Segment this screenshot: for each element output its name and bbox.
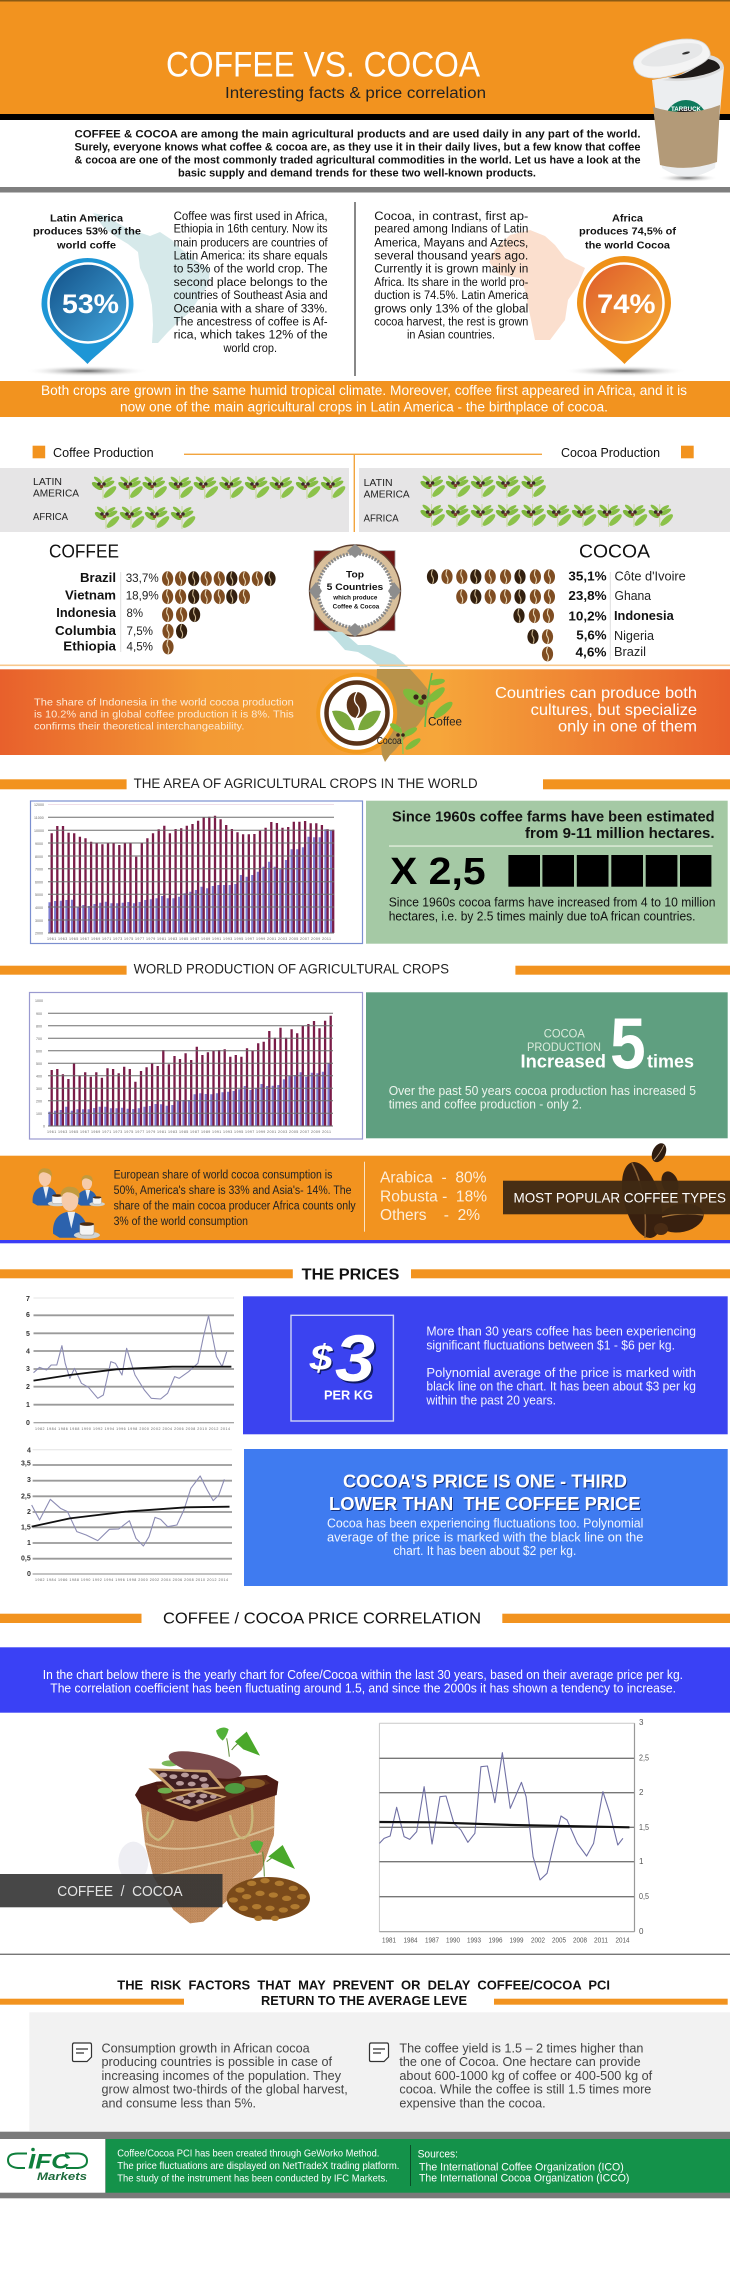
line chart: cocoa price — [21, 1448, 232, 1582]
axis labels: 500 — [36, 1062, 42, 1066]
label: Africa share: the world Cocoa — [585, 239, 670, 251]
icon: bean and leaves logo — [316, 673, 397, 754]
icon: coffee beans — [615, 1141, 706, 1242]
icon: coffee drinkers — [33, 1168, 105, 1239]
text: Indonesia share: confirms their theoretical interchangeability. — [34, 721, 244, 733]
line chart: coffee price: 1982 1984 1986 1988 1990 1992 1994 1996 1998 2000 2002 2004 2006 2008 2010 2012 2014 — [35, 1427, 230, 1431]
text: cocoa origins: Cocoa, in contrast, first ap- — [374, 211, 528, 223]
axis labels: 0 — [43, 1124, 45, 1128]
line chart: coffee price: 4 — [26, 1348, 30, 1356]
axis labels: 11000 — [34, 816, 44, 820]
panel: cocoa price one third lower: LOWER THAN THE COFFEE PRICE — [330, 1495, 642, 1515]
text: sources: The International Coffee Organization (ICO) — [419, 2162, 624, 2174]
intro text: basic supply and demand trends for these two well-known products. — [178, 168, 536, 180]
panel: cocoa production by region: AFRICA — [364, 513, 399, 524]
panel: cocoa production increased 5 times: times and coffee production - only 2. — [389, 1098, 582, 1112]
axis labels: 5000 — [35, 893, 43, 897]
text: coffee price fluctuations: More than 30 years coffee has been experiencing — [426, 1325, 696, 1339]
line chart: coffee price: 5 — [26, 1331, 30, 1338]
text: coffee yield risk: cocoa. While the coffee is still 1.5 times more — [399, 2083, 651, 2097]
panel: cocoa production increased 5 times — [366, 992, 728, 1138]
list: top cocoa producers — [427, 542, 686, 661]
label: Latin America share: produces 53% of the — [33, 226, 141, 238]
list: top coffee producers: 18,9% — [126, 588, 159, 602]
axis labels: 700 — [36, 1037, 42, 1041]
list: top coffee producers: 4,5% — [126, 640, 153, 654]
subtitle: Interesting facts & price correlation — [225, 85, 486, 102]
list: top coffee producers: 8% — [126, 606, 143, 620]
panel: cocoa production by region — [359, 468, 730, 532]
red bars — [52, 816, 333, 933]
banner: humid tropical climate: Both crops are grown in the same humid tropical climate. Moreover, coffee first appeared in Africa, and it is — [41, 383, 687, 398]
panel: cocoa production increased 5 times: 5 — [610, 1004, 646, 1084]
logo: IFC Markets: Markets — [37, 2171, 87, 2183]
blue bars — [50, 829, 331, 933]
panel: cocoa price one third lower: COCOA'S PRICE IS ONE - THIRD — [343, 1472, 627, 1492]
label: Coffee: Coffee — [428, 717, 462, 729]
axis labels: 10000 — [34, 829, 44, 833]
panel: cocoa production increased 5 times: Increased — [520, 1051, 606, 1071]
text: coffee price fluctuations: within the past 20 years. — [425, 1393, 556, 1407]
text: cocoa origins: peared among Indians of Latin — [374, 224, 528, 236]
intro text — [74, 128, 640, 180]
grey rule under intro — [0, 187, 730, 192]
center divider — [354, 202, 356, 376]
badge: top 5 countries: which produce — [332, 595, 378, 601]
line chart: coffee/cocoa ratio: 1,5 — [639, 1823, 649, 1832]
axis labels: 300 — [36, 1087, 42, 1091]
line chart: cocoa price: 1,5 — [21, 1524, 31, 1532]
text: cocoa origins: duction is 74.5%. Latin America — [374, 290, 529, 302]
bar chart: area of crops — [30, 801, 362, 944]
text: coffee yield risk: The coffee yield is 1.5 – 2 times higher than — [399, 2041, 643, 2055]
text: consumption growth risk: increasing incomes of the population. They — [102, 2069, 342, 2083]
price box: $ — [310, 1338, 335, 1380]
text: coffee price fluctuations: black line on the chart. It has been about $3 per kg — [426, 1380, 696, 1394]
text: coffee yield risk — [399, 2041, 653, 2110]
text: coffee type shares: Others - 2% — [380, 1207, 480, 1224]
line chart: coffee price: 7 — [26, 1296, 30, 1303]
list: top coffee producers — [49, 542, 276, 654]
text: cocoa origins: Africa. Its share in the world pro- — [374, 277, 528, 289]
axis labels: 8000 — [35, 855, 43, 859]
text: consumption shares — [114, 1169, 356, 1228]
label: Africa share — [579, 213, 677, 251]
black squares — [508, 855, 711, 887]
text: coffee type shares — [380, 1169, 487, 1224]
line chart: cocoa price: 4 — [27, 1448, 31, 1454]
list: top cocoa producers: 23,8% — [568, 589, 607, 603]
label: coffee / cocoa bar: COFFEE / COCOA — [57, 1883, 182, 1900]
line chart: coffee/cocoa ratio: 1 — [639, 1857, 644, 1866]
pin: 74%: 74% — [597, 289, 656, 319]
icon: cocoa plant — [389, 722, 422, 754]
text: coffee price fluctuations: Polynomial average of the price is marked with — [426, 1366, 696, 1380]
price box: $ — [308, 1337, 334, 1378]
text: cocoa origins: several thousand years ago. — [374, 250, 528, 262]
line chart: coffee/cocoa ratio — [379, 1718, 649, 1945]
panel: cocoa production by region: LATIN — [364, 478, 393, 489]
text: coffee yield risk: expensive than the cocoa. — [399, 2096, 546, 2110]
text: coffee price fluctuations: significant fluctuations between $1 - $6 per kg. — [426, 1338, 675, 1352]
panel: cocoa price one third lower: chart. It has been about $2 per kg. — [393, 1544, 576, 1558]
heading: area of crops — [0, 776, 730, 791]
label: Latin America share — [33, 213, 141, 251]
list: top coffee producers: Indonesia — [56, 605, 117, 620]
line chart: coffee price: 0 — [26, 1420, 30, 1427]
line chart: coffee price: 6 — [26, 1312, 30, 1319]
list: top cocoa producers: COCOA — [579, 542, 650, 562]
text: consumption shares: share of the main cocoa producer Africa counts only — [114, 1200, 356, 1212]
line chart: cocoa price: 3 — [27, 1477, 31, 1484]
list: top coffee producers: 7,5% — [126, 624, 153, 638]
line chart: coffee price: 3 — [26, 1366, 30, 1373]
text: method note: Coffee/Cocoa PCI has been created through GeWorko Method. — [117, 2148, 379, 2160]
text: cocoa origins: America, Mayans and Aztecs, — [374, 238, 528, 250]
line chart: coffee/cocoa ratio: 2011 — [594, 1936, 608, 1945]
text: coffee origins — [174, 211, 328, 355]
text: sources — [418, 2148, 629, 2185]
axis labels: 12000 — [34, 803, 44, 807]
heading: risk factors — [0, 1978, 728, 2008]
text: consumption growth risk — [102, 2041, 348, 2110]
panel: risk factors — [29, 2012, 730, 2131]
logo: IFC Markets — [8, 2148, 87, 2183]
footer — [0, 2132, 730, 2198]
list: top cocoa producers: 35,1% — [568, 570, 607, 584]
text: method note: The price fluctuations are displayed on NetTradeX trading platform. — [117, 2160, 399, 2172]
text: coffee type shares: Arabica - 80% — [380, 1169, 486, 1186]
label: most popular coffee types — [503, 1181, 730, 1214]
text: consumption growth risk: Consumption growth in African cocoa — [102, 2041, 310, 2055]
list: top coffee producers: COFFEE — [49, 542, 119, 562]
bar chart: world production — [30, 992, 362, 1139]
legend: production headings — [33, 445, 694, 532]
heading: the prices: THE PRICES — [302, 1266, 400, 1283]
banner: interchangeability — [0, 669, 730, 762]
label: Cocoa: Cocoa — [377, 736, 402, 747]
heading: the prices — [0, 1266, 730, 1283]
panel: $3 per kg — [243, 1296, 728, 1434]
panel: cocoa production by region: AMERICA — [364, 490, 410, 501]
label: Africa share: Africa — [612, 213, 643, 225]
line chart: coffee/cocoa ratio: 2005 — [552, 1936, 566, 1945]
line chart: coffee/cocoa ratio: 2 — [639, 1788, 644, 1797]
price box: 3 — [335, 1321, 375, 1395]
map: South America — [93, 213, 210, 343]
icon: coffee plant — [400, 673, 455, 727]
text: coffee origins: Oceania with a share of 33%. — [174, 304, 328, 316]
badge: top 5 countries: Top — [346, 569, 364, 580]
axis labels: 600 — [36, 1050, 42, 1054]
list: top cocoa producers: Ghana — [614, 589, 651, 603]
text: coffee origins: Ethiopia in 16th century. Now its — [174, 224, 328, 236]
line chart: coffee/cocoa ratio: 2014 — [616, 1936, 630, 1945]
blue bars — [50, 1063, 329, 1126]
line chart: coffee/cocoa ratio: 2002 — [531, 1936, 545, 1945]
list: top cocoa producers: 5,6% — [576, 628, 607, 642]
callout: countries specialize: Countries can produce both — [495, 685, 697, 702]
line chart: coffee price: 2 — [26, 1384, 30, 1391]
axis labels: 4000 — [35, 906, 43, 910]
panel: cocoa price one third lower: COCOA'S PRICE IS ONE - THIRD — [344, 1473, 628, 1493]
legend: production headings: Coffee Production — [53, 445, 154, 460]
axis labels: 100 — [36, 1112, 42, 1116]
icon: takeaway coffee cup — [633, 39, 724, 182]
axis labels — [34, 803, 331, 941]
callout: countries specialize: cultures, but specialize — [531, 702, 697, 719]
panel: cocoa production increased 5 times: times — [647, 1051, 694, 1071]
text: coffee origins: world crop. — [223, 343, 277, 355]
text: coffee origins: Latin America: its share equals — [174, 250, 328, 262]
text: coffee origins: Coffee was first used in Africa, — [174, 211, 328, 223]
text: cocoa origins: Currently it is grown mainly in — [374, 263, 528, 275]
band: correlation explanation: The correlation coefficient has been fluctuating around 1.5, and since the 2000s it has shown a tendency to increase. — [50, 1682, 676, 1696]
list: top coffee producers: Vietnam — [65, 587, 116, 602]
axis labels: 2000 — [35, 932, 43, 936]
map: Africa — [489, 230, 585, 340]
text: cocoa origins: in Asian countries. — [407, 329, 495, 341]
header band — [0, 0, 730, 120]
axis labels: 1961 1963 1965 1967 1969 1971 1973 1975 1977 1979 1981 1983 1985 1987 1989 1991 1993 1995 1997 1999 2001 2003 2005 2007 2009 2011 — [47, 937, 331, 941]
legend: production headings: Cocoa Production — [561, 445, 660, 460]
line chart: cocoa price: 1 — [27, 1540, 31, 1547]
panel: coffee and cocoa farm area: Since 1960s coffee farms have been estimated — [392, 809, 715, 825]
line chart: coffee/cocoa ratio: 1987 — [425, 1936, 439, 1945]
line chart: coffee/cocoa ratio: 0,5 — [639, 1892, 649, 1901]
text: consumption shares: European share of world cocoa consumption is — [114, 1169, 333, 1181]
line chart: coffee/cocoa ratio: 3 — [639, 1718, 644, 1727]
line chart: cocoa price: 1982 1984 1986 1988 1990 1992 1994 1996 1998 2000 2002 2004 2006 2008 2010 2012 2014 — [35, 1578, 228, 1582]
label: most popular coffee types: MOST POPULAR COFFEE TYPES — [514, 1190, 726, 1206]
panel: cocoa price one third lower: average of the price is marked with the black line on the — [327, 1530, 643, 1544]
heading: price correlation — [0, 1610, 730, 1627]
banner: humid tropical climate — [0, 381, 730, 417]
list: top cocoa producers: Côte d'Ivoire — [614, 570, 686, 584]
line chart: cocoa price: 3,5 — [21, 1460, 31, 1468]
heading: risk factors: THE RISK FACTORS THAT MAY PREVENT OR DELAY COFFEE/COCOA PCI — [117, 1978, 610, 1992]
panel: coffee production by region: AMERICA — [33, 489, 79, 500]
line chart: cocoa price: 2 — [27, 1509, 31, 1516]
heading: price correlation: COFFEE / COCOA PRICE CORRELATION — [163, 1610, 481, 1627]
text: coffee price fluctuations — [425, 1325, 696, 1407]
text: consumption shares: 50%, America's share is 33% and Asia's- 14%. The — [114, 1185, 351, 1197]
line chart: coffee/cocoa ratio: 0 — [639, 1927, 644, 1936]
list: top cocoa producers: Nigeria — [614, 629, 654, 643]
text: Indonesia share: is 10.2% and in global coffee production it is 8%. This — [34, 709, 294, 721]
panel: coffee and cocoa farm area: hectares, i.e. by 2.5 times mainly due toA frican countries. — [389, 909, 696, 923]
axis labels: 7000 — [35, 868, 43, 872]
band: consumption and coffee types — [0, 1141, 730, 1243]
panel: coffee production by region: LATIN — [33, 477, 62, 488]
axis labels: 1000 — [35, 999, 43, 1003]
line chart: cocoa price: 2,5 — [21, 1494, 31, 1500]
badge: top 5 countries — [309, 544, 401, 637]
axis labels: 1961 1963 1965 1967 1969 1971 1973 1975 1977 1979 1981 1983 1985 1987 1989 1991 1993 1995 1997 1999 2001 2003 2005 2007 2009 2011 — [47, 1130, 331, 1134]
panel: cocoa price one third lower — [244, 1449, 728, 1586]
list: top cocoa producers: 10,2% — [568, 610, 607, 624]
heading: area of crops: THE AREA OF AGRICULTURAL CROPS IN THE WORLD — [134, 776, 478, 791]
text: cocoa origins: grows only 13% of the global — [374, 304, 528, 316]
list: top coffee producers: Brazil — [80, 570, 116, 585]
banner: humid tropical climate: now one of the main agricultural crops in Latin America - the birthplace of cocoa. — [120, 400, 608, 414]
multiplier: X 2,5 — [390, 851, 486, 893]
panel: coffee and cocoa farm area: Since 1960s cocoa farms have increased from 4 to 10 million — [389, 896, 716, 910]
title: COFFEE VS. COCOA — [166, 46, 481, 84]
logo: IFC Markets: IFC — [28, 2150, 71, 2174]
list: top coffee producers: Ethiopia — [63, 639, 117, 654]
line chart: coffee price — [26, 1296, 234, 1431]
line chart: coffee price: 1 — [26, 1402, 30, 1409]
pin: 74% — [563, 256, 687, 376]
heading: risk factors: RETURN TO THE AVERAGE LEVE — [261, 1994, 467, 2008]
text: cocoa origins: cocoa harvest, the rest is grown — [374, 316, 528, 328]
text: consumption growth risk: grow almost two-thirds of the global harvest, — [102, 2083, 348, 2097]
panel: cocoa production increased 5 times: COCOA — [544, 1028, 585, 1040]
text: coffee origins: countries of Southeast Asia and — [174, 290, 328, 302]
text: Indonesia share — [34, 697, 294, 733]
axis labels: 900 — [36, 1012, 42, 1016]
panel: cocoa production increased 5 times: PRODUCTION — [527, 1042, 601, 1054]
badge: top 5 countries: 5 Countries — [327, 582, 383, 593]
panel: cocoa price one third lower: LOWER THAN THE COFFEE PRICE — [329, 1494, 641, 1514]
price box: PER KG — [324, 1388, 373, 1403]
label: Latin America share: Latin America — [50, 213, 123, 225]
axis labels: 400 — [36, 1074, 42, 1078]
text: sources: Sources: — [418, 2148, 458, 2160]
heading: world production: WORLD PRODUCTION OF AGRICULTURAL CROPS — [134, 962, 449, 977]
band: correlation explanation: In the chart below there is the yearly chart for Cofee/Cocoa within the last 30 years, based on their average price per kg. — [43, 1668, 683, 1682]
line chart: coffee/cocoa ratio: 1996 — [488, 1936, 502, 1945]
pin: 53% — [25, 258, 149, 376]
heading: world production — [0, 962, 730, 977]
label: coffee / cocoa bar — [0, 1874, 222, 1907]
text: consumption growth risk: producing countries is possible in case of — [102, 2055, 333, 2069]
axis labels: 3000 — [35, 919, 43, 923]
text: coffee origins: main producers are countries of — [174, 238, 328, 250]
text: method note: The study of the instrument has been conducted by IFC Markets. — [117, 2173, 388, 2185]
callout: countries specialize: only in one of them — [558, 719, 697, 736]
text: consumption shares: 3% of the world consumption — [114, 1216, 248, 1228]
rule above risk factors — [0, 1954, 730, 1955]
list: top cocoa producers: Indonesia — [614, 609, 675, 623]
badge: top 5 countries: Coffee & Cocoa — [333, 604, 380, 610]
text: coffee origins: The ancestress of coffee is Af- — [174, 316, 328, 328]
text: coffee yield risk: the one of Cocoa. One hectare can provide — [399, 2055, 641, 2069]
text: coffee type shares: Robusta - 18% — [380, 1188, 487, 1205]
line chart: coffee/cocoa ratio: 1999 — [510, 1936, 524, 1945]
text: Indonesia share: The share of Indonesia in the world cocoa production — [34, 697, 294, 709]
map: Central America link — [327, 631, 408, 667]
icon: note right — [370, 2043, 388, 2062]
label: Latin America share: world coffe — [56, 239, 116, 251]
price box: 3 — [337, 1323, 377, 1397]
text: coffee yield risk: about 600-1000 kg of coffee or 400-500 kg of — [399, 2069, 653, 2083]
line chart: coffee/cocoa ratio: 1993 — [467, 1936, 481, 1945]
list: top coffee producers: 33,7% — [126, 571, 159, 585]
axis labels — [35, 999, 331, 1134]
axis labels: 6000 — [35, 880, 43, 884]
text: coffee origins: rica, which takes 12% of the — [174, 329, 328, 341]
panel: coffee production by region — [0, 468, 349, 532]
axis labels: 200 — [36, 1100, 42, 1104]
intro text: COFFEE & COCOA are among the main agricultural products and are used daily in any part of the world. — [74, 128, 640, 140]
panel: coffee and cocoa farm area: from 9-11 million hectares. — [525, 826, 715, 842]
line chart: coffee/cocoa ratio: 1984 — [404, 1936, 418, 1945]
list: top cocoa producers: Brazil — [614, 645, 646, 659]
band: correlation explanation — [0, 1647, 730, 1713]
icon: takeaway coffee cup: TARBUCK — [671, 107, 702, 113]
map: South America overlay — [376, 669, 432, 762]
line chart: coffee/cocoa ratio: 2,5 — [639, 1754, 649, 1762]
list: top coffee producers: Columbia — [55, 623, 117, 638]
line chart: cocoa price: 0 — [27, 1571, 31, 1578]
price box — [291, 1315, 393, 1421]
panel: coffee production by region: AFRICA — [33, 512, 68, 523]
text: coffee origins: to 53% of the world crop. The — [174, 263, 328, 275]
panel: coffee and cocoa farm area — [366, 801, 728, 944]
line chart: coffee/cocoa ratio: 2008 — [573, 1936, 587, 1945]
line chart: coffee/cocoa ratio: 1981 — [382, 1936, 396, 1945]
illustration: cocoa basket and beans — [118, 1727, 310, 1923]
list: top cocoa producers: 4,6% — [576, 646, 606, 660]
axis labels: 9000 — [35, 842, 43, 846]
text: cocoa origins — [374, 211, 529, 341]
text: method note — [117, 2148, 399, 2185]
text: coffee origins: second place belongs to the — [174, 277, 328, 289]
intro text: & cocoa are one of the most commonly traded agricultural commodities in the world. Let us have a look at the — [74, 154, 640, 166]
red bars — [52, 1016, 331, 1126]
intro text: Surely, everyone knows what coffee & cocoa are, as they use it in their daily lives, but a few know that coffee — [74, 142, 640, 154]
line chart: coffee/cocoa ratio: 1990 — [446, 1936, 460, 1945]
label: Africa share: produces 74,5% of — [579, 226, 677, 238]
text: consumption growth risk: and consume less than 5%. — [102, 2096, 256, 2110]
panel: cocoa price one third lower: Cocoa has been experiencing fluctuations too. Polynomial — [327, 1516, 643, 1530]
line chart: cocoa price: 0,5 — [21, 1556, 31, 1562]
callout: countries specialize — [495, 685, 697, 736]
text: sources: The International Cocoa Organization (ICCO) — [419, 2173, 629, 2185]
axis labels: 800 — [36, 1024, 42, 1028]
pin: 53%: 53% — [62, 289, 119, 319]
icon: note left — [72, 2043, 92, 2062]
rule above banner — [0, 664, 730, 666]
panel: cocoa production increased 5 times: Over the past 50 years cocoa production has increased 5 — [389, 1084, 696, 1098]
